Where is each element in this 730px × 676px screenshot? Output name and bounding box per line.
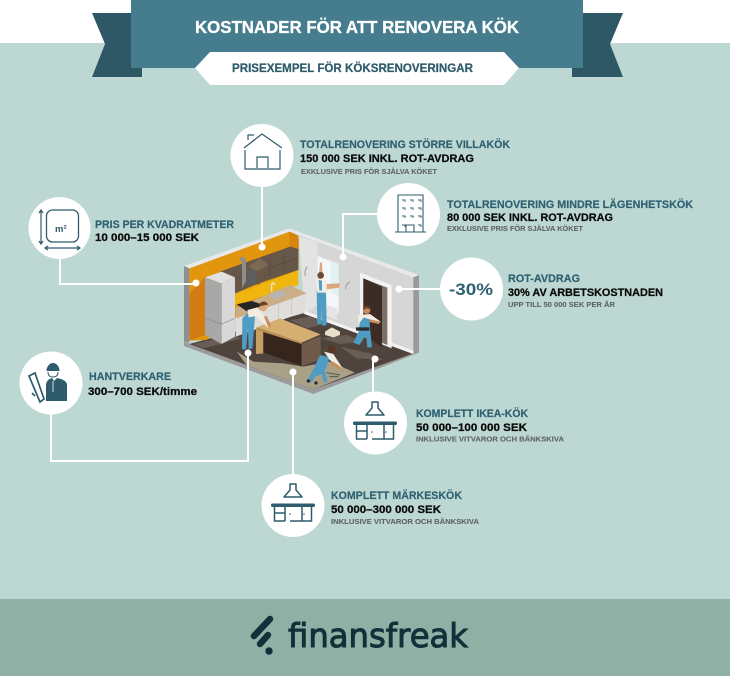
price: 30% AV ARBETSKOSTNADEN xyxy=(508,287,663,299)
door opening xyxy=(363,278,387,345)
item: totalrenovering lägenhetskök xyxy=(377,183,693,246)
right wall xyxy=(299,236,413,354)
label: ROT-AVDRAG xyxy=(508,273,580,285)
icon: house xyxy=(230,124,294,187)
header banner xyxy=(92,0,623,85)
note: INKLUSIVE VITVAROR OCH BÄNKSKIVA xyxy=(416,434,565,444)
price: 10 000–15 000 SEK xyxy=(95,232,199,244)
skirting xyxy=(304,311,413,354)
title: KOSTNADER FÖR ATT RENOVERA KÖK xyxy=(195,17,519,37)
item: pris per kvadratmeter xyxy=(28,197,234,259)
worker by island xyxy=(242,302,271,349)
tile backsplash xyxy=(235,270,298,305)
note: INKLUSIVE VITVAROR OCH BÄNKSKIVA xyxy=(331,517,480,526)
worker at window xyxy=(316,263,340,326)
label: TOTALRENOVERING STÖRRE VILLAKÖK xyxy=(300,138,510,151)
cabinet seams xyxy=(235,256,298,278)
item: totalrenovering villakök xyxy=(230,124,510,187)
worker on floor xyxy=(307,345,343,385)
price: 300–700 SEK/timme xyxy=(88,386,197,398)
fridge xyxy=(205,272,235,283)
window xyxy=(318,256,339,313)
wall top edge xyxy=(184,228,419,277)
note: EXKLUSIVE PRIS FÖR SJÄLVA KÖKET xyxy=(301,167,437,176)
radiator xyxy=(327,305,337,320)
door frame xyxy=(360,273,392,348)
faucet xyxy=(272,283,275,292)
base slab xyxy=(184,342,419,394)
left wall orange xyxy=(189,232,299,341)
toolbox xyxy=(325,327,340,337)
right ribbon xyxy=(572,13,623,77)
label: TOTALRENOVERING MINDRE LÄGENHETSKÖK xyxy=(447,198,693,211)
label: KOMPLETT MÄRKESKÖK xyxy=(331,489,462,502)
label: HANTVERKARE xyxy=(89,371,171,383)
kitchen renovation illustration xyxy=(184,228,419,394)
wall shade xyxy=(189,277,205,341)
worker at door xyxy=(353,306,381,347)
logo wordmark: finansfreak xyxy=(288,616,469,655)
icon: square metres xyxy=(28,197,90,259)
hob xyxy=(237,301,264,312)
label: KOMPLETT IKEA-KÖK xyxy=(416,407,528,420)
island xyxy=(256,327,263,354)
item: komplett märkeskök xyxy=(262,474,480,537)
left ribbon xyxy=(92,13,142,77)
price: 50 000–300 000 SEK xyxy=(331,504,441,516)
door xyxy=(363,278,382,347)
floor xyxy=(189,313,413,389)
connector lines xyxy=(51,185,440,475)
icon: kitchen xyxy=(344,392,407,454)
price: 80 000 SEK INKL. ROT-AVDRAG xyxy=(447,212,613,224)
counter top xyxy=(235,285,307,318)
price: 150 000 SEK INKL. ROT-AVDRAG xyxy=(300,153,474,165)
icon: apartment building xyxy=(377,183,440,246)
extractor hood xyxy=(239,257,246,288)
icon: kitchen xyxy=(262,474,324,537)
worn floor patch xyxy=(237,352,355,389)
icon: square metres: m² xyxy=(55,224,67,235)
icon: minus 30 percent xyxy=(440,258,503,320)
price: 50 000–100 000 SEK xyxy=(416,422,527,434)
note: UPP TILL 50 000 SEK PER ÅR xyxy=(508,300,616,309)
upper cabinets xyxy=(220,247,298,293)
connector dots xyxy=(192,244,402,376)
wall lamps xyxy=(305,267,350,289)
item: komplett ikea-kök xyxy=(344,392,565,454)
icon: finansfreak logo mark xyxy=(254,619,273,655)
note: EXKLUSIVE PRIS FÖR SJÄLVA KÖKET xyxy=(447,224,583,233)
subtitle plate xyxy=(195,52,519,85)
banner body xyxy=(131,0,583,68)
footer xyxy=(0,599,730,676)
base cabinets xyxy=(236,293,305,337)
label: PRIS PER KVADRATMETER xyxy=(95,219,234,231)
icon: minus 30 percent: -30% xyxy=(449,280,493,299)
icon: craftsman xyxy=(20,352,82,414)
item: hantverkare xyxy=(20,352,197,414)
subtitle: PRISEXEMPEL FÖR KÖKSRENOVERINGAR xyxy=(232,60,473,75)
item: rot-avdrag xyxy=(440,258,663,320)
wall ends xyxy=(184,266,189,343)
